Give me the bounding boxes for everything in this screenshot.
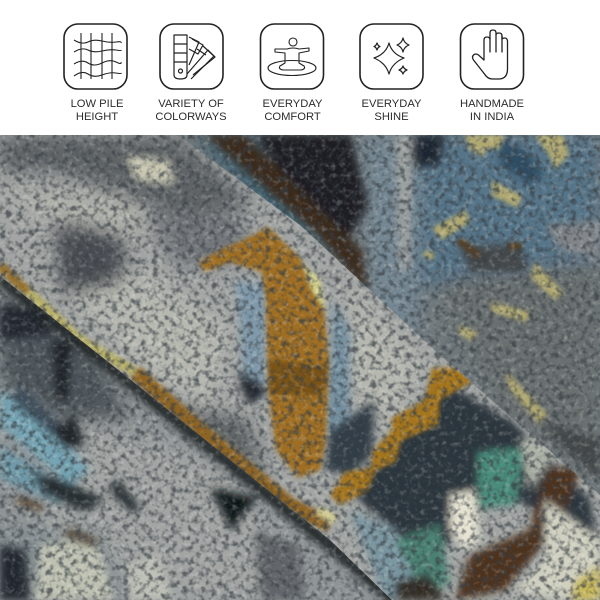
label: everyday shine: SHINE: [374, 111, 409, 123]
label: variety of colorways: VARIETY OF: [158, 98, 224, 110]
rug roll: foreground band: [0, 135, 600, 600]
icon: open hand: [460, 24, 524, 89]
label: handmade in india: HANDMADE: [460, 98, 524, 110]
label: variety of colorways: COLORWAYS: [155, 111, 227, 123]
feature: handmade in india: [460, 24, 524, 123]
label: everyday comfort: COMFORT: [264, 111, 321, 123]
icon: low pile weave: [64, 24, 127, 89]
feature: low pile height: [64, 24, 127, 123]
icon: meditating figure: [260, 24, 324, 89]
label: everyday comfort: EVERYDAY: [263, 98, 322, 110]
label: handmade in india: IN INDIA: [470, 111, 515, 123]
feature icon row: [64, 24, 524, 123]
label: low pile height: HEIGHT: [76, 111, 118, 123]
label: everyday shine: EVERYDAY: [362, 98, 421, 110]
feature: variety of colorways: [155, 24, 227, 123]
yarn knot texture: [0, 135, 600, 600]
photo: rolled rug close-up: [0, 135, 600, 600]
label: low pile height: LOW PILE: [71, 98, 123, 110]
icon: sparkles: [360, 24, 423, 89]
roll shadow: [0, 278, 400, 600]
gold pattern on roll: [0, 227, 472, 525]
icon: colour fan deck: [160, 24, 223, 89]
feature: everyday comfort: [260, 24, 324, 123]
rug background: upper right: [170, 135, 600, 505]
feature: everyday shine: [360, 24, 423, 123]
rug background: lower left: [0, 260, 395, 600]
